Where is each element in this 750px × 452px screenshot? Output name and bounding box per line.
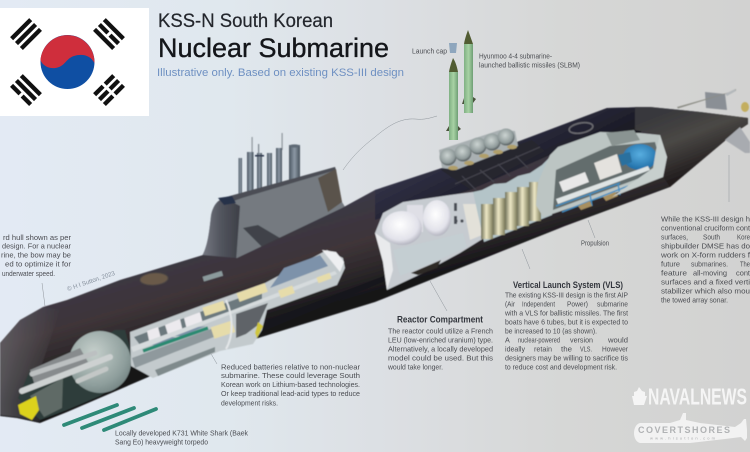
- label: launch cap: Launch cap: [412, 46, 447, 56]
- icon: ship: [632, 387, 647, 405]
- text: batteries note: development risks.: [221, 398, 278, 408]
- hull marking: [203, 271, 223, 282]
- text: rudder note: cont: [736, 268, 750, 278]
- text: vertical launch system: A: [505, 336, 510, 344]
- text: vertical launch system: submarine: [597, 300, 628, 308]
- hull frame end: [322, 250, 344, 272]
- lower deck: [132, 322, 232, 368]
- text: rudder note: the towed array sonar.: [661, 296, 728, 304]
- text: batteries note: Reduced batteries relative to non-nuclear: [221, 362, 361, 372]
- engine room cutaway: [536, 130, 667, 217]
- text: batteries note: Korean work on Lithium-based technologies.: [221, 380, 360, 389]
- icon: trigram bottom left: [10, 74, 42, 106]
- title: Nuclear Submarine: [158, 33, 389, 63]
- text: reactor compartment: [387, 314, 493, 372]
- submarine: [0, 89, 750, 423]
- frame: [375, 233, 393, 290]
- lattice: [243, 225, 280, 247]
- title: Illustrative only. Based on existing KSS-III design: [157, 67, 404, 79]
- logo: Covert Shores: [634, 413, 747, 443]
- rear deck: [375, 107, 650, 220]
- machinery deck: [556, 166, 650, 204]
- blue pipes: [556, 183, 628, 212]
- text: vertical launch system: with a VLS for ballistic missiles. The first: [504, 308, 628, 318]
- text: bow hull note: design. For a nuclear: [2, 242, 72, 250]
- icon: launch cap: [449, 43, 457, 53]
- shell: [473, 155, 558, 242]
- submarine silhouette: [634, 413, 747, 443]
- yellow fitting: [255, 322, 263, 338]
- VLS cutaway: [439, 128, 558, 242]
- text: rudder note: conventional cruciform cont: [661, 224, 750, 232]
- stern ring: [568, 121, 594, 135]
- text: torpedo note: Sang Eo) heavyweight torpedo: [115, 438, 208, 446]
- lower fin: [725, 127, 750, 153]
- text: torpedo note: Locally developed K731 White Shark (Baek: [115, 428, 248, 438]
- text: vertical launch system: (Air: [505, 300, 516, 308]
- flood port: [140, 272, 168, 286]
- text: vertical launch system: be increased to 10 (as shown).: [505, 326, 597, 336]
- torpedo room sphere: [69, 331, 131, 393]
- icon: trigram top left: [10, 18, 42, 50]
- text: bow hull note: [1, 233, 72, 278]
- text: vertical launch system: nuclear-powered: [518, 336, 560, 344]
- sail blue fairwater: [218, 196, 236, 205]
- steps: [147, 312, 203, 345]
- propeller: [741, 102, 749, 112]
- torpedo racks: [143, 328, 208, 351]
- text: rudder note: stabilizer which also mou: [661, 286, 750, 296]
- hull: [0, 107, 748, 423]
- text: batteries note: Or keep traditional lead-acid types to reduce: [221, 389, 360, 398]
- text: batteries note: submarine. These could leverage South: [221, 371, 360, 380]
- text: reactor compartment: LEU (low-enriched uranium) type.: [388, 336, 493, 344]
- text: vertical launch system: ideally: [505, 344, 525, 354]
- text: bow hull note: underwater speed.: [2, 269, 55, 278]
- bow sonar ring: [18, 396, 39, 420]
- lower cream bays: [578, 192, 618, 210]
- watermark: © H I Sutton, 2023: [66, 270, 116, 293]
- logo: Covert Shores: www.hisutton.com: [650, 436, 716, 440]
- text: vertical launch system: designers may be willing to sacrifice tis: [505, 354, 628, 362]
- icon: trigram bottom right: [93, 74, 125, 106]
- text: vertical launch system: to reduce cost and development risk.: [505, 362, 617, 372]
- text: vertical launch system: Power): [567, 300, 588, 308]
- aft interior: [553, 142, 660, 210]
- text: rudder note: surfaces and a fixed verti: [661, 278, 750, 286]
- text: reactor compartment: Alternatively, a locally developed: [388, 344, 493, 354]
- electric motor blue: [618, 144, 657, 170]
- text: vertical launch system: version: [570, 336, 593, 344]
- icon: taegeuk: [40, 35, 94, 89]
- floors: [152, 326, 206, 346]
- bow compartment: [18, 330, 132, 420]
- upper wall: [134, 290, 262, 345]
- keel strip: [262, 273, 392, 332]
- main cutaway: [130, 250, 345, 378]
- launch tube caps: [439, 128, 518, 170]
- text: bow hull note: ed to optimize it for: [5, 260, 72, 268]
- text: rudder note: surfaces,: [661, 232, 688, 242]
- torpedoes: [64, 405, 156, 430]
- reactor floor slab: [393, 233, 467, 276]
- upper rudder: [677, 89, 736, 110]
- text: vertical launch system: [504, 280, 629, 372]
- missile tubes: [481, 182, 541, 239]
- deck line: [131, 271, 337, 352]
- text: batteries note: [221, 362, 361, 408]
- text: rudder note: shipbuilder DMSE has do: [661, 242, 750, 250]
- deck grid: [441, 140, 545, 190]
- forward cutaway: [18, 330, 132, 420]
- reactor compartment cutaway: [375, 192, 484, 290]
- text: reactor compartment: model could be used. But this: [388, 354, 493, 362]
- curved grey compartment: [236, 303, 268, 338]
- label: missile description: [479, 52, 580, 70]
- heading: VLS: Vertical Launch System (VLS): [513, 280, 623, 291]
- curved bulkhead: [226, 300, 232, 349]
- label: propulsion: Propulsion: [581, 238, 609, 248]
- sail cowl: [200, 198, 240, 262]
- text: bow hull note: rd hull shown as per: [3, 233, 72, 242]
- cream equipment: [202, 259, 332, 339]
- sail rear panel: [318, 169, 342, 212]
- text: rudder note: While the KSS-III design h: [661, 214, 750, 224]
- bow highlight: [0, 307, 60, 422]
- lower passage: [155, 347, 215, 376]
- flag of South Korea: [0, 8, 149, 116]
- small cylinder: [407, 205, 423, 232]
- text: rudder note: work on X-form rudders f: [660, 250, 750, 260]
- title: KSS-N South Korean: [158, 11, 333, 32]
- text: torpedo note: [115, 428, 248, 446]
- slab shadow: [411, 260, 441, 275]
- text: reactor compartment: The reactor could utilize a French: [388, 326, 493, 336]
- sail body: [200, 167, 347, 262]
- text: rudder note: future: [661, 260, 680, 268]
- text: vertical launch system: The existing KSS-III design is the first AIP: [505, 290, 628, 300]
- text: vertical launch system: VLS.: [580, 344, 592, 354]
- text: vertical launch system: However: [602, 344, 629, 354]
- masts: [238, 133, 300, 197]
- sail: [200, 133, 347, 262]
- reactor right dome: [423, 200, 451, 236]
- text: rudder note: feature: [661, 268, 687, 278]
- bulkhead ports: [454, 203, 464, 224]
- tube plate: [30, 348, 88, 386]
- logo: Covert Shores: COVERTSHORES: [638, 425, 730, 435]
- leader lines: [42, 116, 729, 364]
- white machinery: [559, 154, 622, 192]
- icon: trigram top right: [93, 18, 125, 50]
- label: missile description: launched ballistic missiles (SLBM): [479, 60, 580, 70]
- sail top edge: [219, 167, 336, 203]
- text: vertical launch system: boats have 6 tubes, but it is expected to: [505, 318, 628, 326]
- text: rudder note: all-moving: [693, 268, 727, 278]
- blue bulkhead: [270, 255, 328, 288]
- text: bow hull note: rine, the bow may be: [1, 250, 71, 260]
- title: [157, 11, 404, 79]
- text: vertical launch system: would: [607, 336, 628, 344]
- text: rudder note: submarines.: [691, 260, 728, 268]
- lower bay: [30, 378, 63, 417]
- missile: lower SLBM: [446, 58, 461, 140]
- text: vertical launch system: the: [561, 344, 572, 354]
- stern section: [635, 107, 748, 187]
- upper hatch panel: [606, 130, 640, 146]
- text: vertical launch system: retain: [534, 344, 552, 354]
- text: reactor compartment: would take longer.: [387, 362, 443, 372]
- text: vertical launch system: Independent: [522, 300, 555, 308]
- torpedo tubes: [22, 353, 110, 391]
- text: rudder note: [660, 214, 750, 304]
- text: rudder note: South: [703, 232, 720, 242]
- heading: reactor compartment: Reactor Compartment: [397, 314, 484, 326]
- aft bulkhead: [463, 204, 482, 240]
- missile: upper SLBM: [462, 30, 476, 113]
- reactor left dome: [382, 211, 422, 245]
- light shell rim: [612, 135, 667, 197]
- label: missile description: Hyunmoo 4-4 submarine-: [479, 52, 553, 60]
